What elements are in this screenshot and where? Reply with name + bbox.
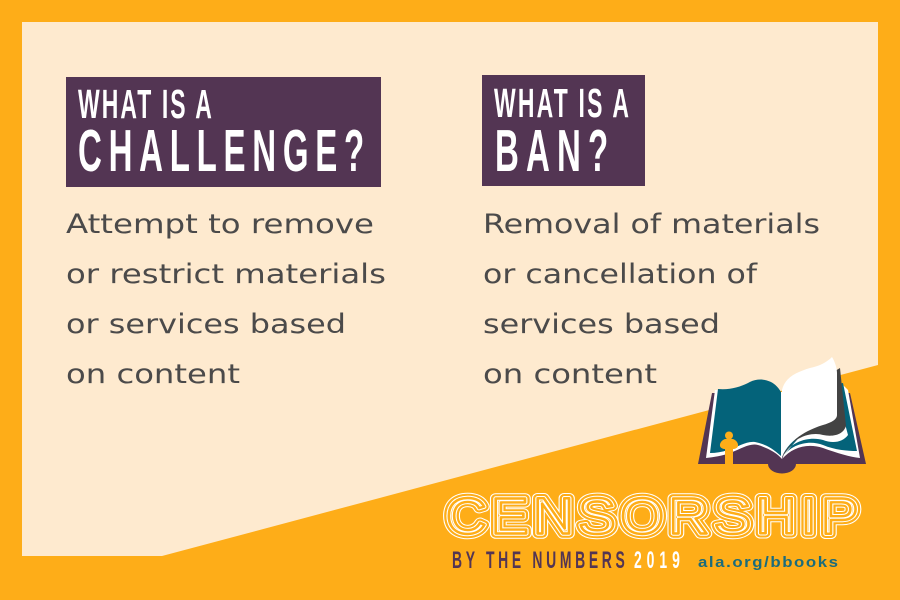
title: censorship: CENSORSHIP: [446, 488, 859, 545]
title: censorship: CENSORSHIP: [446, 488, 859, 545]
book cover: [698, 393, 866, 474]
heading: what is a challenge: [66, 77, 381, 187]
title: censorship: CENSORSHIP: [446, 488, 859, 545]
icon: open book: [698, 357, 866, 474]
url: ala.org/bbooks: ala.org/bbooks: [698, 555, 838, 571]
right turning white page: [782, 357, 837, 457]
heading: what is a ban: [482, 75, 645, 186]
panel: what is a ban: [482, 75, 820, 390]
text: ban definition: Removal of materials: [483, 209, 820, 240]
title: censorship: CENSORSHIP: [446, 488, 859, 545]
text: ban definition: services based: [483, 309, 720, 340]
text: challenge definition: or restrict materials: [66, 259, 386, 290]
text: ban definition: on content: [483, 359, 657, 390]
right teal page: [782, 383, 857, 457]
text: challenge definition: on content: [66, 359, 240, 390]
right white page edge: [782, 380, 860, 459]
figure standing by book: [720, 432, 738, 464]
left teal page: [710, 380, 781, 456]
heading: what is a challenge: CHALLENGE?: [78, 119, 364, 185]
left white page edge: [706, 390, 782, 459]
right white band: [782, 420, 848, 457]
text: ban definition: or cancellation of: [483, 259, 758, 290]
heading: what is a ban: BAN?: [495, 119, 608, 185]
panel: what is a challenge: [66, 77, 386, 390]
text: ban definition: [483, 209, 820, 390]
text: challenge definition: [66, 209, 386, 390]
heading: what is a ban: WHAT IS A: [494, 81, 629, 127]
text: challenge definition: Attempt to remove: [66, 209, 374, 240]
heading: what is a challenge: WHAT IS A: [78, 82, 212, 128]
text: challenge definition: or services based: [66, 309, 346, 340]
subtitle: by the numbers 2019: BY THE NUMBERS: [452, 547, 625, 574]
right dark gray page: [782, 368, 846, 457]
subtitle: by the numbers 2019: 2019: [634, 547, 680, 574]
